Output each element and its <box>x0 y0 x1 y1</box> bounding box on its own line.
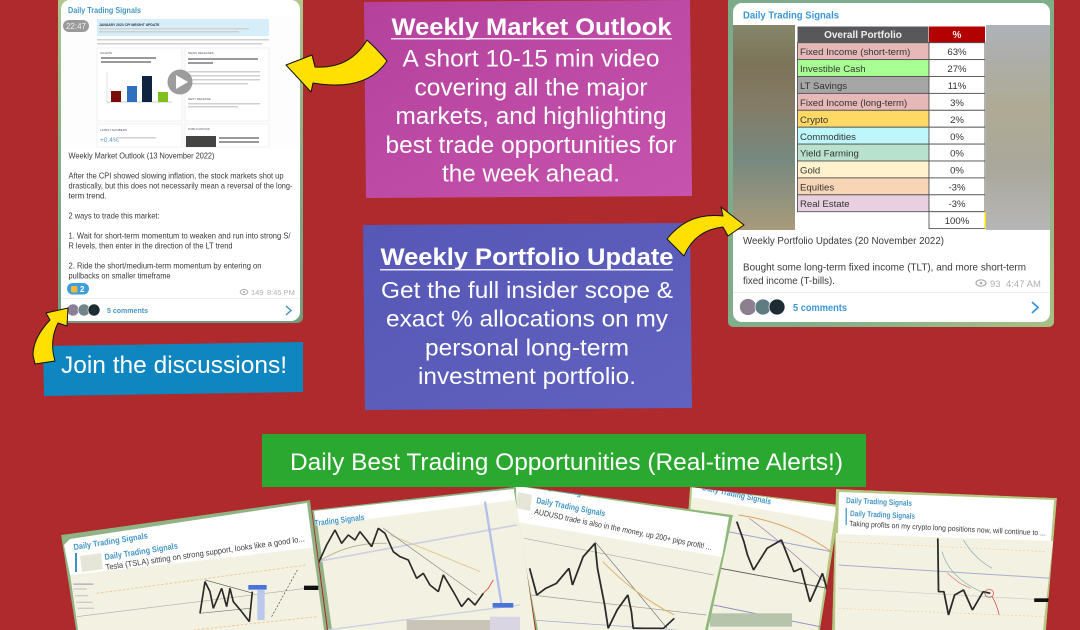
icon: chevron <box>286 306 291 315</box>
portfolio allocation table: Overall Portfolio <box>824 30 902 41</box>
post caption <box>743 236 1026 287</box>
panel: weekly market outlook <box>364 0 692 198</box>
description: the week ahead. <box>442 160 620 188</box>
portfolio allocation table: Investible Cash <box>800 64 866 75</box>
banner: daily best trading opportunities: Daily Best Trading Opportunities (Real-time Alerts!) <box>290 449 843 476</box>
callout: join the discussions: Join the discussions! <box>61 352 287 379</box>
arrow: to comments <box>33 308 68 364</box>
post channel name: Daily Trading Signals <box>743 10 840 22</box>
post body text: 2 ways to trade this market: <box>68 212 160 220</box>
alert text: Tesla (TSLA) sitting on strong support, looks like a good lo... <box>105 534 305 572</box>
banner: daily best trading opportunities <box>262 434 866 487</box>
panel: weekly portfolio update <box>363 223 692 410</box>
portfolio allocation table: Crypto <box>800 115 828 126</box>
portfolio allocation table: 0% <box>950 148 964 160</box>
bar chart in thumbnail <box>107 72 172 102</box>
view count and time <box>240 288 295 297</box>
channel name: Daily Trading <box>535 479 583 498</box>
chart card: fourth trade alert <box>688 487 836 630</box>
description: exact % allocations on my <box>386 306 668 332</box>
heading: Weekly Portfolio Update <box>380 244 674 271</box>
description: markets, and highlighting <box>396 103 666 130</box>
portfolio allocation table: 2% <box>950 115 964 126</box>
heading: Weekly Market Outlook <box>392 14 672 41</box>
post body text: 2. Ride the short/medium-term momentum by entering on <box>68 262 262 270</box>
icon: video play button <box>168 70 192 94</box>
chart card: crypto trade alert <box>832 489 1057 630</box>
commenter avatars <box>740 298 785 316</box>
channel name: Trading Signals <box>314 512 365 528</box>
reply quote bar <box>846 508 847 525</box>
video thumbnail: PUBLICATIONS <box>188 127 210 131</box>
reply channel name: Daily Trading Signals <box>104 540 179 562</box>
video thumbnail: CHARTS <box>100 51 112 55</box>
comments link: 5 comments <box>793 303 848 314</box>
channel name: Daily Trading Signals <box>702 482 772 507</box>
panel: portfolio telegram post <box>728 0 1054 327</box>
post body text <box>68 152 293 280</box>
post body text: Weekly Market Outlook (13 November 2022) <box>68 152 215 160</box>
portfolio allocation table: 0% <box>950 132 964 143</box>
chart card: AUDUSD trade alert <box>513 479 733 630</box>
video thumbnail: +0.4% <box>100 137 119 144</box>
price chart <box>73 565 318 630</box>
reply quote bar <box>75 553 77 572</box>
video thumbnail: NEXT RELEASE <box>188 97 211 101</box>
panel: market outlook telegram post <box>58 0 303 323</box>
callout: join the discussions <box>43 342 303 396</box>
post channel name: Daily Trading Signals <box>68 5 141 15</box>
portfolio allocation table: 63% <box>947 47 967 58</box>
reaction pill: 2 <box>80 285 85 294</box>
portfolio allocation table: % <box>953 30 962 41</box>
description <box>381 277 673 389</box>
video duration badge: 22:47 <box>66 22 87 31</box>
icon: chevron <box>1032 302 1038 313</box>
post body text: pullbacks on smaller timeframe <box>68 272 171 280</box>
portfolio allocation table: Commodities <box>800 132 856 143</box>
post caption: Weekly Portfolio Updates (20 November 2022) <box>743 236 944 247</box>
description: best trade opportunities for <box>386 132 676 159</box>
comments link: 5 comments <box>107 306 148 315</box>
view count and time: 149 <box>251 288 264 297</box>
blurred photo right <box>986 25 1050 230</box>
chart card: Tesla trade alert <box>61 500 327 630</box>
video thumbnail: JANUARY 2023 CPI WEIGHT UPDATE <box>99 23 160 27</box>
view count and time: 8:45 PM <box>267 288 295 297</box>
portfolio allocation table: 11% <box>948 81 967 92</box>
channel name: Daily Trading Signals <box>73 530 149 552</box>
video thumbnail: NEWS RELEASES <box>188 51 214 55</box>
portfolio allocation table: -3% <box>948 199 966 210</box>
portfolio allocation table: Fixed Income (long-term) <box>800 98 907 109</box>
view count and time <box>976 279 1041 290</box>
portfolio allocation table: 27% <box>947 64 967 75</box>
video thumbnail <box>61 16 300 147</box>
portfolio allocation table: 3% <box>950 98 964 109</box>
chart card: second trade alert <box>312 487 535 630</box>
price chart <box>317 502 520 630</box>
portfolio allocation table: Gold <box>800 166 820 176</box>
post body text: 1. Wait for short-term momentum to weaken and run into strong S/ <box>68 232 291 240</box>
description: personal long-term <box>425 334 629 360</box>
alert text: AUDUSD trade is also in the money, up 200+ pips profit! ... <box>534 507 713 552</box>
commenter avatars <box>67 304 100 316</box>
post body text: drastically, but this does not necessarily mean a reversal of the long- <box>68 182 293 190</box>
video thumbnail: LATEST NUMBERS <box>100 128 127 132</box>
description: A short 10-15 min video <box>402 46 660 72</box>
post body text: After the CPI showed slowing inflation, the stock markets shot up <box>68 172 284 180</box>
video duration badge <box>63 20 89 32</box>
description <box>386 46 676 188</box>
reply channel name: Daily Trading Signals <box>850 509 916 521</box>
post caption: Bought some long-term fixed income (TLT), and more short-term <box>743 262 1026 274</box>
reply thumbnail <box>516 492 532 511</box>
reply thumbnail <box>80 553 103 572</box>
alert text: Taking profits on my crypto long positions now, will continue to ... <box>849 519 1046 538</box>
portfolio allocation table: Real Estate <box>800 199 850 210</box>
portfolio allocation table <box>795 25 986 230</box>
post body text: term trend. <box>68 192 106 200</box>
reaction pill <box>67 283 89 294</box>
view count and time: 93 <box>990 279 1001 290</box>
channel name: Daily Trading Signals <box>846 496 913 508</box>
description: Get the full insider scope & <box>381 277 673 303</box>
arrow: to market outlook post <box>286 40 387 92</box>
description: investment portfolio. <box>418 363 636 389</box>
portfolio allocation table: 0% <box>950 166 964 176</box>
portfolio allocation table: 100% <box>945 216 970 227</box>
portfolio allocation table: Yield Farming <box>800 148 859 160</box>
portfolio allocation table: LT Savings <box>800 81 847 92</box>
blurred photo left <box>733 25 795 230</box>
portfolio allocation table: Fixed Income (short-term) <box>800 47 910 58</box>
price chart <box>524 538 714 630</box>
post caption: fixed income (T-bills). <box>743 276 835 287</box>
view count and time: 4:47 AM <box>1006 279 1041 290</box>
description: covering all the major <box>414 74 648 102</box>
portfolio allocation table: Equities <box>800 182 834 194</box>
price chart <box>710 515 831 628</box>
portfolio allocation table: -3% <box>948 182 966 194</box>
arrow: to portfolio post <box>667 207 744 256</box>
post body text: R levels, then enter in the direction of the LT trend <box>68 242 233 250</box>
price chart <box>839 538 1053 617</box>
reply channel name: Daily Trading Signals <box>536 495 606 518</box>
